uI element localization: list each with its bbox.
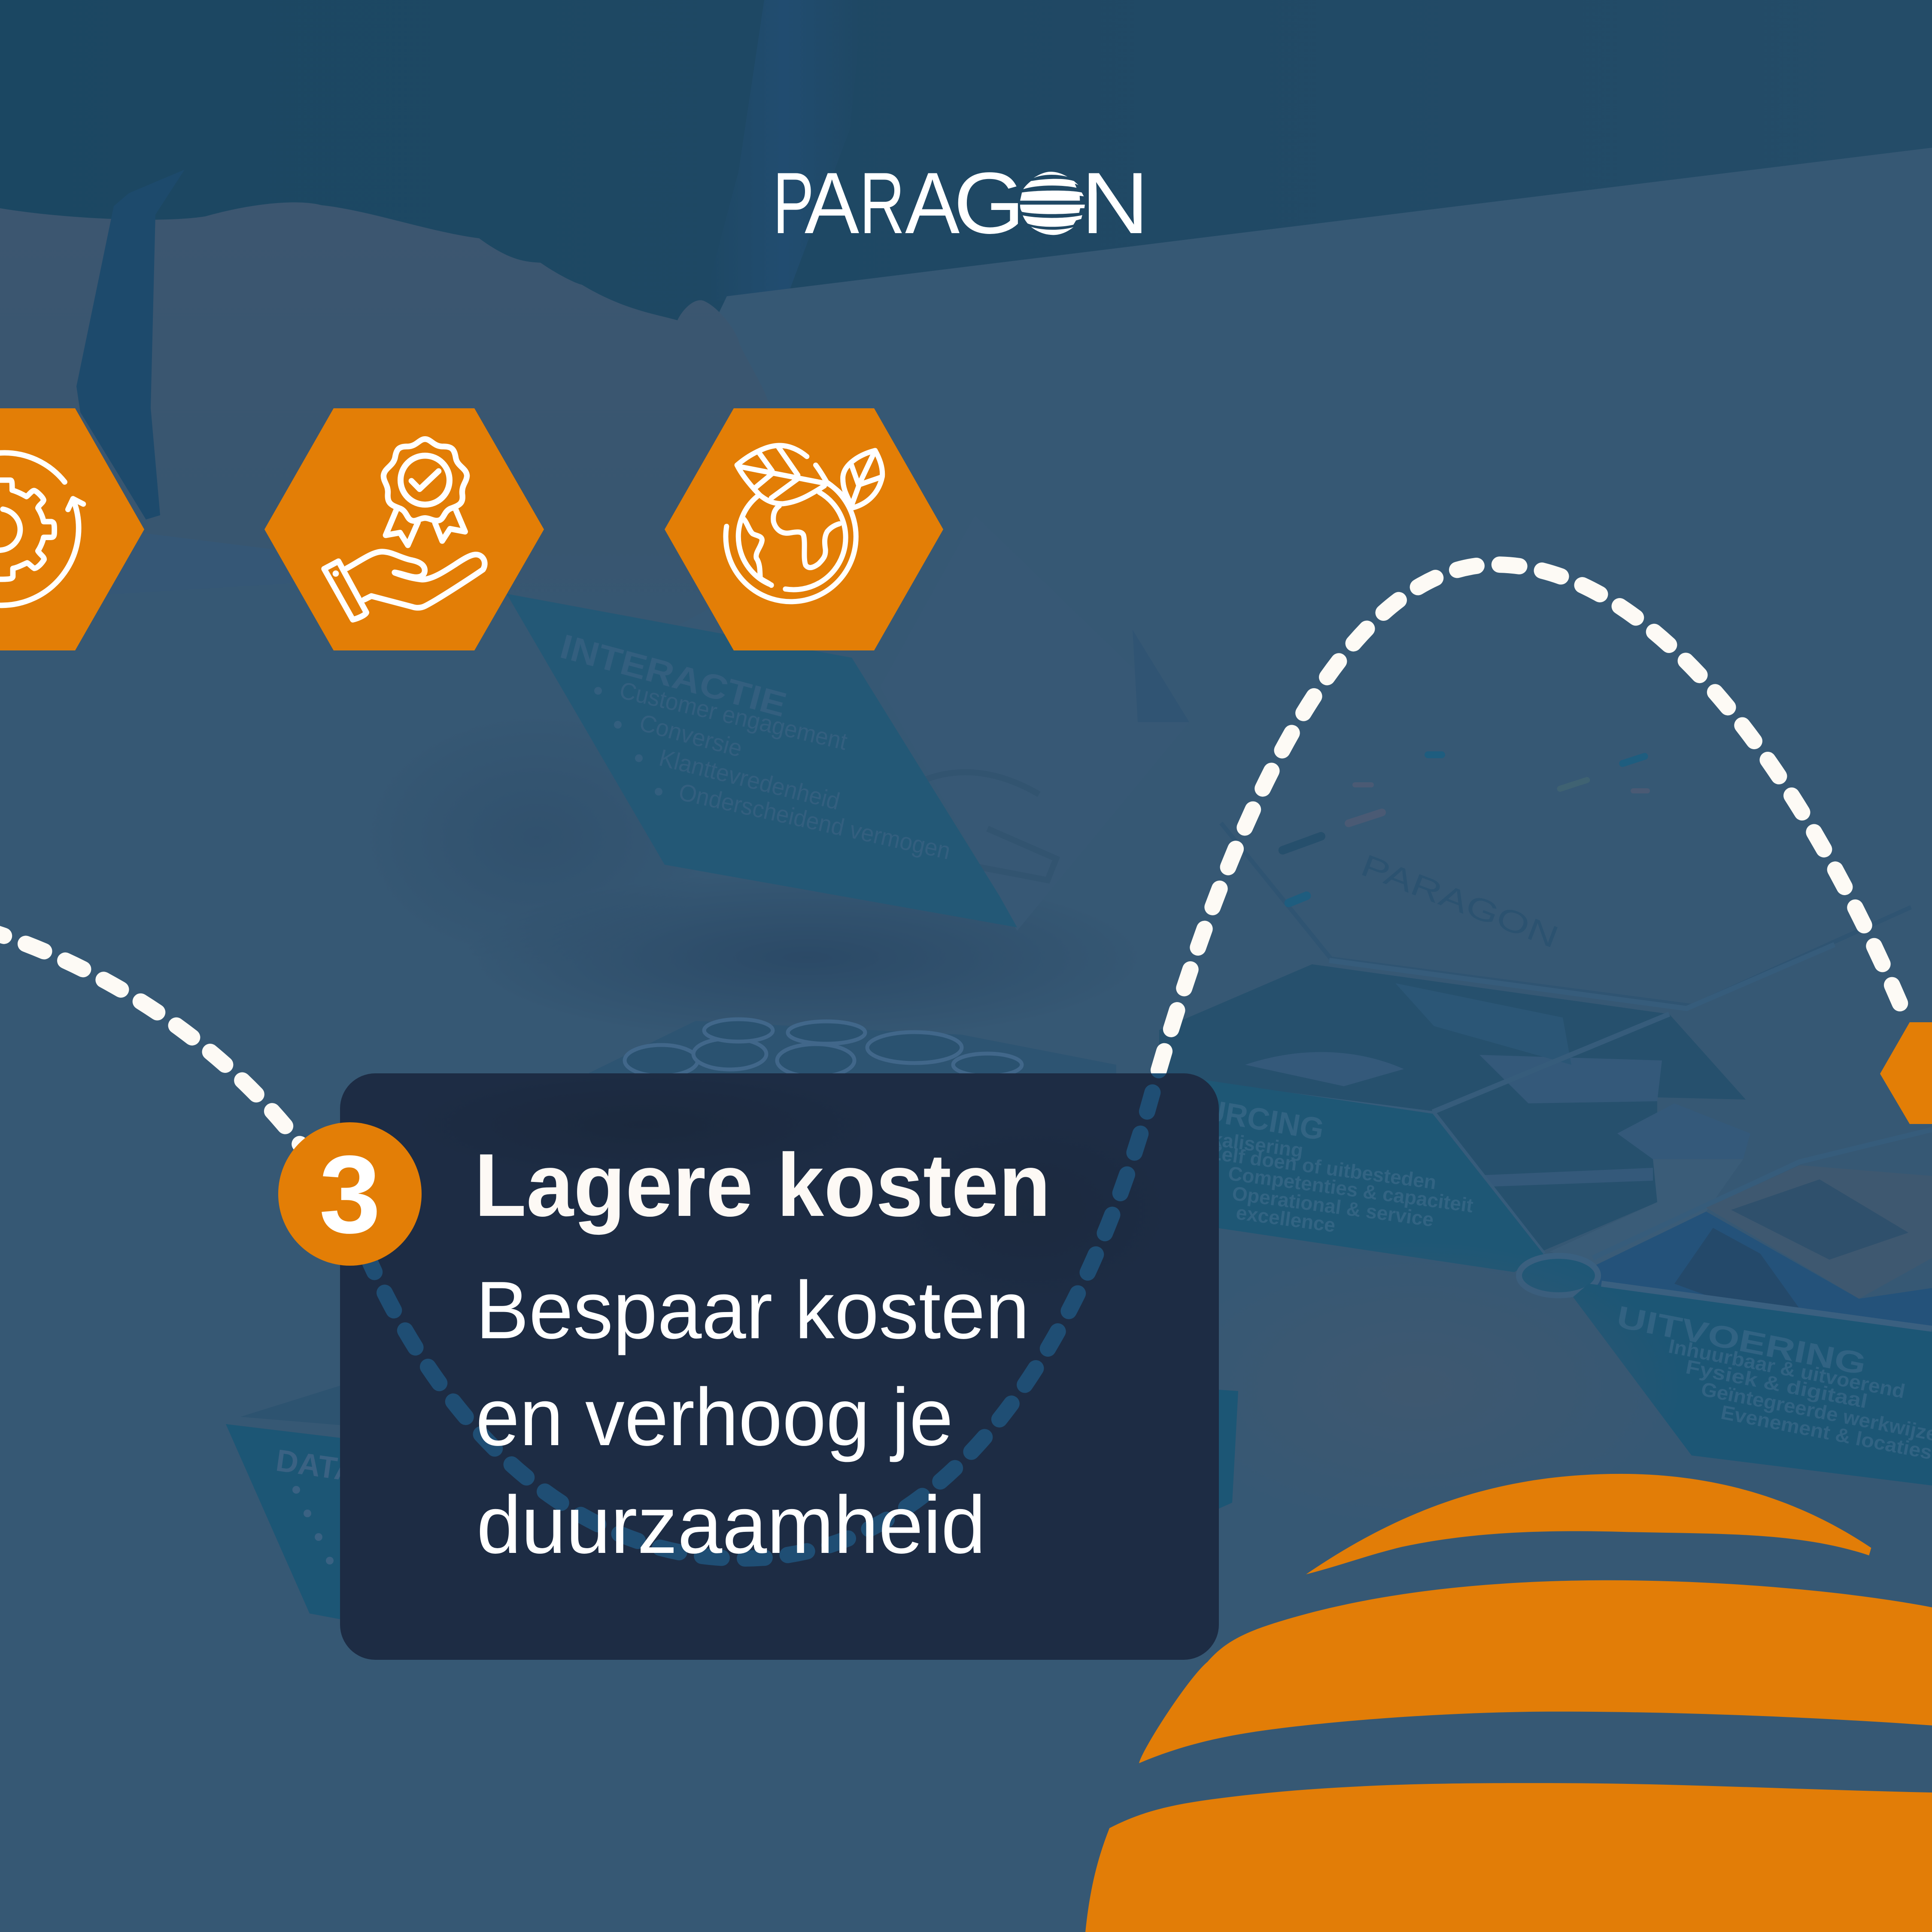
table shadow <box>464 872 1151 1043</box>
logo: Paragon: N <box>1081 154 1149 252</box>
dark wall behind the table <box>0 0 1932 326</box>
photo card: uitvoering: UITVOERING <box>1614 1300 1869 1382</box>
body text <box>476 1265 1030 1571</box>
photo card: data: DATA <box>274 1443 359 1488</box>
photo card: sourcing: Competenties & capaciteit <box>1227 1162 1475 1217</box>
photo card: sourcing: excellence <box>1235 1201 1337 1236</box>
circular badge <box>1519 1256 1598 1295</box>
logo: Paragon: A <box>805 155 860 252</box>
photo card: uitvoering: Evenement & locaties <box>1719 1401 1932 1464</box>
photo hex: dark picture <box>1159 964 1746 1251</box>
photo card: paragon paper: PARAGON <box>1356 848 1563 955</box>
photo card: paragon paper <box>1221 751 1911 1006</box>
panel: benefit 3 card <box>340 1073 1219 1660</box>
body text: Bespaar kosten <box>476 1265 1030 1356</box>
hexagon: quality <box>264 408 544 650</box>
decorative globe shape: orange bands <box>1085 1474 1932 1932</box>
body text: duurzaamheid <box>477 1479 986 1571</box>
body text: en verhoog je <box>476 1372 953 1463</box>
photo card: sourcing: SOURCING <box>1157 1085 1327 1147</box>
photo card: uitvoering: Inhuurbaar & uitvoerend <box>1667 1335 1907 1403</box>
photo card: interactie: Conversie <box>637 709 745 762</box>
light area beside the picture hex <box>1550 1159 1743 1267</box>
photo card: sourcing: Operational & service <box>1231 1182 1435 1231</box>
hexagon: gear and cycle <box>0 408 144 650</box>
icon: award rosette above an open hand <box>324 439 485 620</box>
photo card: uitvoering: Fysiek & digitaal <box>1684 1355 1869 1413</box>
number badge 3 <box>278 1122 422 1266</box>
tablet <box>1706 1165 1932 1299</box>
number badge 3: 3 <box>319 1132 381 1256</box>
logo: Paragon: A <box>905 155 960 252</box>
dark figure <box>1674 1228 1803 1314</box>
icon: gear with circular arrow <box>0 453 83 605</box>
photo card: sourcing: Lokalisering <box>1186 1124 1305 1162</box>
photo card: interactie <box>507 594 1017 927</box>
dashed route behind the card <box>362 1073 1166 1567</box>
dashed route line <box>0 565 1906 1558</box>
photo card: uitvoering <box>1573 1284 1932 1485</box>
photo details inside the picture hex <box>1245 983 1750 1187</box>
object beside the card <box>880 515 1189 931</box>
white lines around the hexes <box>1211 945 1932 1258</box>
hexagon: next step at right edge <box>1880 1022 1932 1124</box>
hexagon: sustainability <box>665 408 943 650</box>
logo: Paragon: G <box>954 155 1025 252</box>
photo card: data <box>226 1385 1238 1620</box>
hand <box>0 202 841 644</box>
logo globe <box>1020 172 1085 235</box>
logo: Paragon: P <box>773 155 814 252</box>
photo card: sourcing: Zelf doen of uitbesteden <box>1209 1141 1438 1194</box>
photo card: interactie: Klanttevredenheid <box>656 744 843 815</box>
honeycomb object above the card <box>580 1019 1116 1082</box>
wristband <box>76 170 185 519</box>
icon: globe with leaves <box>726 446 882 601</box>
photo card: uitvoering: Geïntegreerde werkwijze <box>1699 1378 1932 1446</box>
card texture <box>404 1069 1176 1305</box>
blue area behind the tablet <box>1573 1212 1932 1331</box>
light vertical stripe <box>704 0 863 301</box>
photo card: interactie: Customer engagement <box>617 676 850 755</box>
photo card: interactie: Onderscheidend vermogen <box>676 778 953 865</box>
photo card: sourcing <box>1157 1073 1543 1272</box>
logo: Paragon: R <box>860 155 905 252</box>
logo: Paragon <box>773 154 1149 252</box>
hand in lower right of photo <box>1151 1241 1683 1533</box>
heading: Lagere kosten <box>474 1136 1051 1235</box>
photo card: interactie: INTERACTIE <box>556 627 790 724</box>
